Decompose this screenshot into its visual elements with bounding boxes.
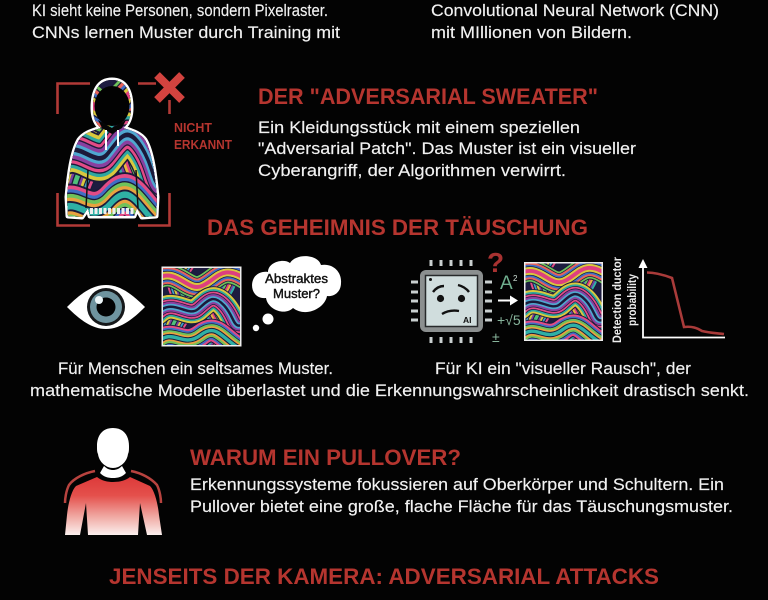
detection frame brackets xyxy=(58,84,170,226)
axis label xyxy=(610,257,639,343)
math symbols and arrow xyxy=(487,247,521,345)
hoodie xyxy=(64,78,160,220)
thought bubble xyxy=(252,256,341,331)
intro text left: CNNs lernen Muster durch Training mit xyxy=(32,23,340,42)
intro text right: mit MIllionen von Bildern. xyxy=(431,23,632,42)
label: nicht erkannt: ERKANNT xyxy=(174,137,232,152)
text block: pullover: Erkennungssysteme fokussieren auf Oberkörper und Schultern. Ein xyxy=(190,475,724,494)
icon: confused AI chip: AI xyxy=(463,315,472,325)
text block: pullover: Pullover bietet eine große, flache Fläche für das Täuschungsmuster. xyxy=(190,497,733,516)
icon: eye xyxy=(67,285,145,329)
icon: hoodie in detection frame xyxy=(56,67,182,235)
label: nicht erkannt xyxy=(174,120,232,152)
heading: adversarial attacks: JENSEITS DER KAMERA: ADVERSARIAL ATTACKS xyxy=(109,564,659,589)
intro text left xyxy=(32,1,340,42)
icon: person with pullover xyxy=(65,428,162,535)
icon: red cross xyxy=(157,75,182,100)
heading: adversarial sweater: DER "ADVERSARIAL SWEATER" xyxy=(258,84,598,109)
intro text left: KI sieht keine Personen, sondern Pixelraster. xyxy=(32,1,328,20)
probability curve xyxy=(647,272,724,334)
math symbols and arrow: 2 xyxy=(513,274,518,283)
heading: geheimnis: DAS GEHEIMNIS DER TÄUSCHUNG xyxy=(207,215,588,240)
text block: adversarial sweater xyxy=(258,118,636,180)
text block: pullover xyxy=(190,475,733,516)
pattern: AI view xyxy=(521,259,608,346)
thought bubble: Muster? xyxy=(273,287,320,301)
heading: pullover: WARUM EIN PULLOVER? xyxy=(190,445,461,470)
text block: adversarial sweater: Cyberangriff, der Algorithmen verwirrt. xyxy=(258,161,566,180)
math symbols and arrow: ? xyxy=(487,247,504,278)
axis label: Detection ductor xyxy=(610,257,624,343)
pattern: human view xyxy=(158,263,247,352)
caption: AI xyxy=(30,359,749,400)
text block: adversarial sweater: "Adversarial Patch". Das Muster ist ein visueller xyxy=(258,139,636,158)
caption: AI: mathematische Modelle überlastet und die Erkennungswahrscheinlichkeit drastisch senkt. xyxy=(30,381,749,400)
math symbols and arrow: ± xyxy=(492,329,500,345)
intro text right: Convolutional Neural Network (CNN) xyxy=(431,1,719,20)
icon: confused AI chip xyxy=(411,260,492,343)
text block: adversarial sweater: Ein Kleidungsstück mit einem speziellen xyxy=(258,118,580,137)
math symbols and arrow: +√5 xyxy=(497,312,521,328)
caption: humans: Für Menschen ein seltsames Muster. xyxy=(58,359,333,378)
thought bubble: Abstraktes xyxy=(265,272,328,286)
math symbols and arrow: A xyxy=(500,273,513,294)
intro text right xyxy=(431,1,719,42)
axis label: probability xyxy=(625,274,639,326)
label: nicht erkannt: NICHT xyxy=(174,120,212,135)
chart: detection probability xyxy=(610,257,725,343)
caption: AI: Für KI ein "visueller Rausch", der xyxy=(435,359,691,378)
